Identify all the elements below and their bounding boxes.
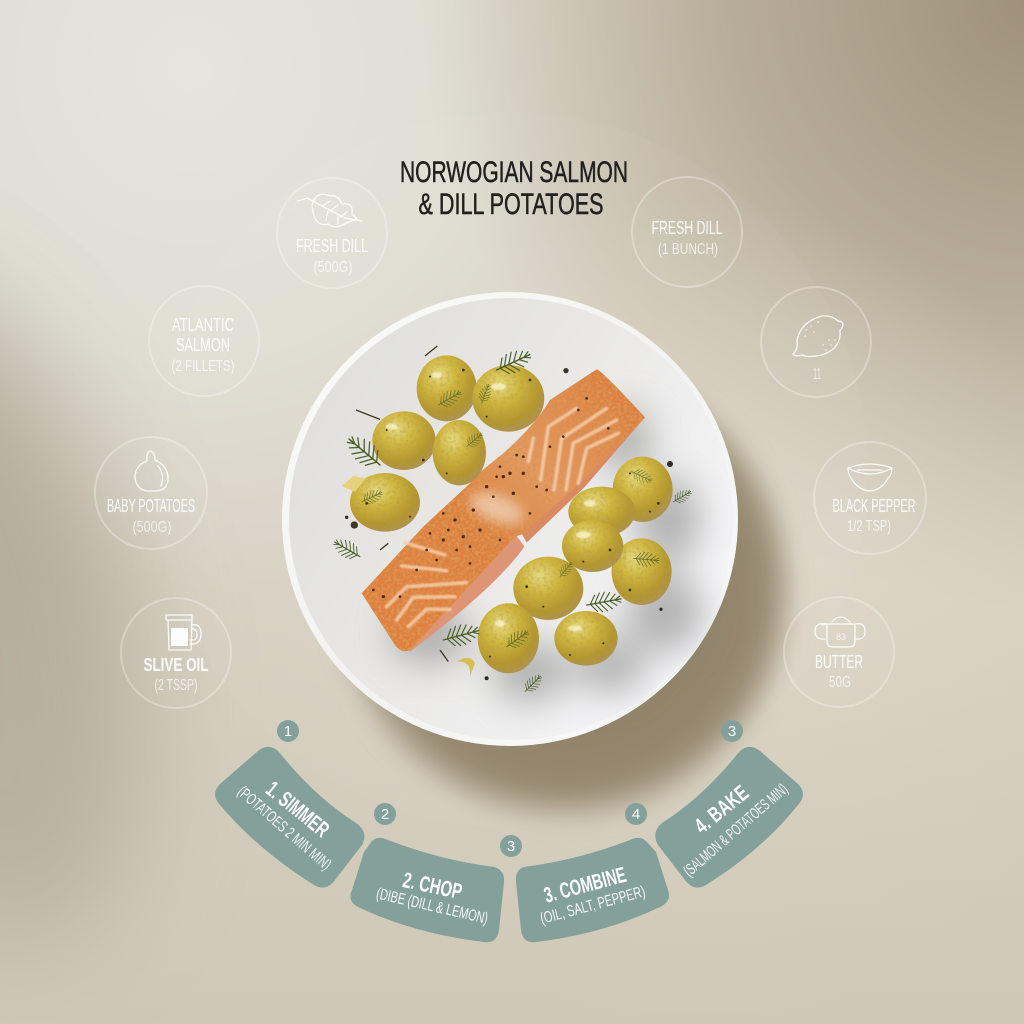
ingredient: butter: BUTTER bbox=[815, 651, 863, 672]
step number badges: 2 bbox=[381, 806, 389, 823]
icon: bowl bbox=[848, 464, 892, 491]
step 1 card: (POTATOES 2 MIN MIN) bbox=[234, 783, 334, 874]
step 3 card: (OIL, SALT, PEPPER) bbox=[538, 883, 647, 928]
ingredient: atlantic salmon: ATLANTIC bbox=[172, 314, 234, 335]
icon: lemon bbox=[793, 316, 843, 356]
ingredient: olive oil bbox=[121, 598, 231, 708]
step number badges bbox=[277, 720, 743, 857]
ingredient: black pepper: 1/2 TSP) bbox=[847, 518, 891, 535]
step 2 card: (DIBE (DILL & LEMON) bbox=[375, 886, 489, 928]
title: NORWOGIAN SALMON bbox=[400, 156, 628, 189]
ingredient: baby potatoes bbox=[95, 437, 207, 549]
ingredient: baby potatoes: BABY POTATOES bbox=[107, 495, 195, 516]
ingredient: fresh dill (right): (1 BUNCH) bbox=[658, 241, 718, 258]
ingredient: fresh dill (left) bbox=[277, 178, 387, 288]
icon: potato bbox=[135, 451, 168, 491]
step number badges: 4 bbox=[632, 806, 640, 823]
step 3 card: 3. COMBINE bbox=[541, 862, 629, 908]
ingredient: butter bbox=[784, 597, 894, 707]
ingredient: black pepper: BLACK PEPPER bbox=[832, 495, 916, 516]
step 4 card bbox=[655, 747, 803, 888]
ingredient: atlantic salmon: (2 FILLETS) bbox=[172, 358, 234, 375]
step number badges: 3 bbox=[728, 723, 736, 740]
step 2 card: 2. CHOP bbox=[401, 867, 465, 904]
ingredient: olive oil: SLIVE OIL bbox=[144, 654, 208, 675]
step number badges: 1 bbox=[284, 723, 292, 740]
title bbox=[400, 156, 628, 221]
ingredient: fresh dill (left): (500G) bbox=[314, 259, 352, 276]
step 4 card: (SALMON & POTATOES MIN) bbox=[681, 781, 791, 880]
step 3 card bbox=[516, 838, 669, 942]
step 1 card: 1. SIMMER bbox=[261, 776, 334, 842]
ingredient: atlantic salmon bbox=[149, 286, 259, 396]
icon: butter dish: 83 bbox=[836, 632, 846, 642]
icon: mug bbox=[166, 615, 201, 650]
specks and lemon zest bbox=[342, 368, 673, 680]
ingredient: fresh dill (right) bbox=[632, 177, 742, 287]
step 2 card bbox=[350, 838, 504, 942]
step 4 card: 4. BAKE bbox=[689, 780, 753, 838]
food bbox=[331, 345, 694, 696]
ingredient: lemon bbox=[761, 287, 871, 397]
title: & DILL POTATOES bbox=[418, 188, 604, 221]
ingredient: atlantic salmon: SALMON bbox=[176, 334, 230, 355]
food shadows bbox=[390, 406, 703, 702]
ingredient: olive oil: (2 TSSP) bbox=[154, 677, 198, 694]
step number badges: 3 bbox=[507, 838, 515, 855]
ingredient: lemon: 11 bbox=[813, 366, 821, 383]
ingredient: black pepper bbox=[814, 442, 926, 554]
ingredient: fresh dill (left): FRESH DILL bbox=[296, 235, 368, 256]
potatoes bbox=[350, 355, 673, 673]
icon: leaf bbox=[298, 194, 362, 227]
step 1 card bbox=[215, 747, 364, 888]
plate with salmon and potatoes bbox=[282, 292, 738, 746]
ingredient: butter: 50G bbox=[829, 674, 851, 691]
ingredient: baby potatoes: (500G) bbox=[132, 519, 172, 536]
ingredient: fresh dill (right): FRESH DILL bbox=[652, 217, 722, 238]
plate bbox=[282, 292, 738, 746]
salmon fillet bbox=[362, 369, 645, 652]
dill sprigs bbox=[331, 345, 694, 696]
plate shadow bbox=[335, 362, 791, 818]
